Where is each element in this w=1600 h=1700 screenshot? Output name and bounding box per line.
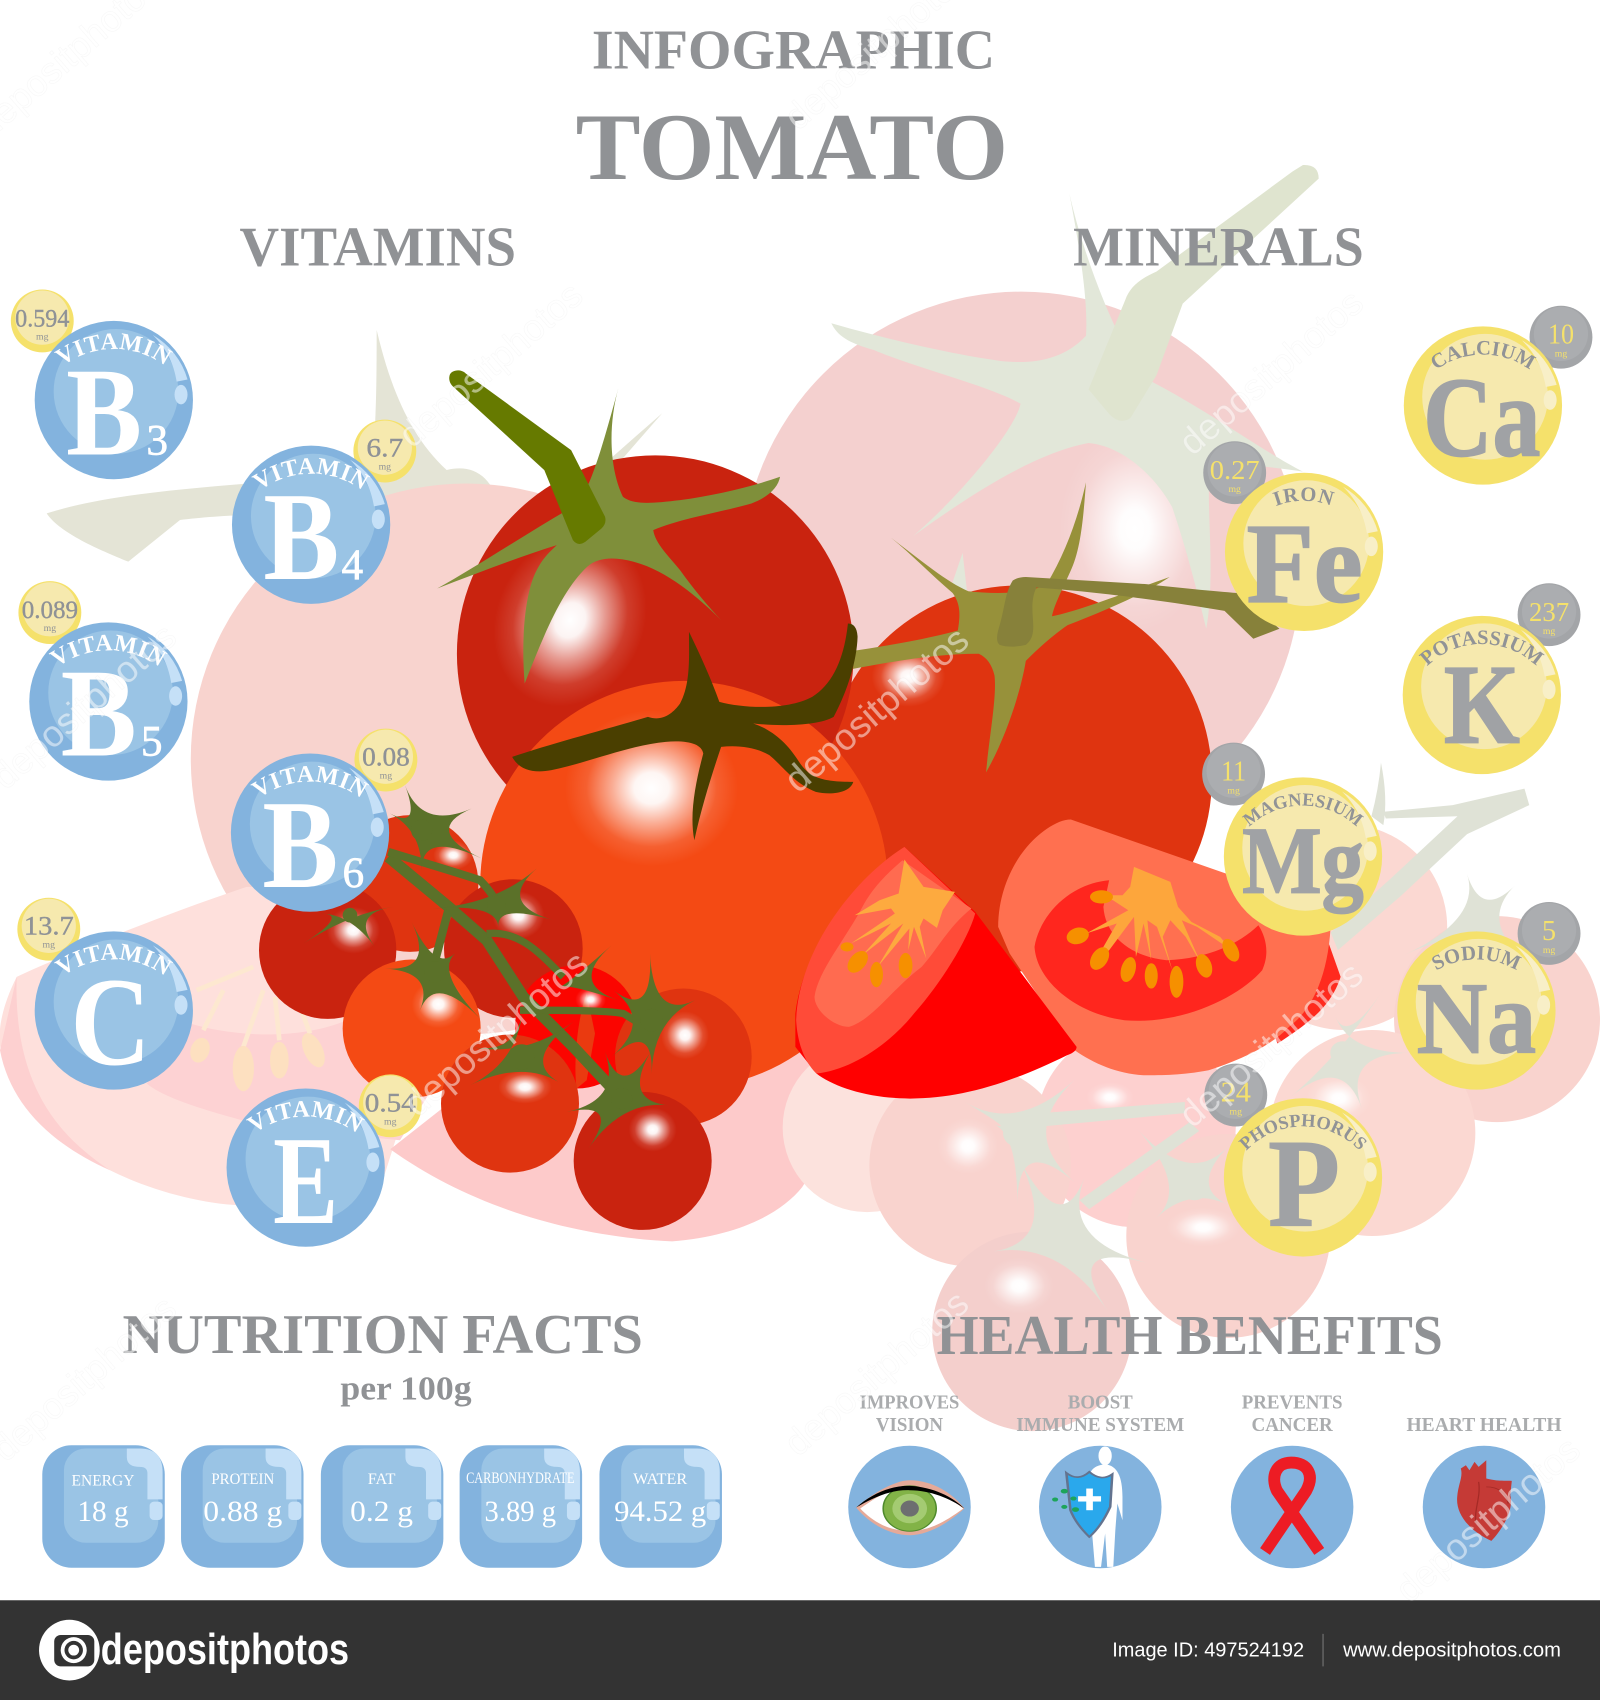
- benefit labels: IMPROVES: [860, 1392, 959, 1413]
- vitamin B3: 3: [146, 416, 168, 464]
- subheading per 100g: per 100g: [340, 1371, 472, 1408]
- vitamin C: mg: [43, 940, 55, 951]
- mineral calcium: CALCIUM: [1432, 340, 1536, 370]
- footer logo text: depositphotos: [101, 1626, 349, 1674]
- faded cherry stems: [965, 763, 1529, 1312]
- heading vitamins: VITAMINS: [240, 217, 516, 279]
- mineral potassium: POTASSIUM: [1418, 630, 1544, 666]
- icon: heart: [1423, 1446, 1545, 1568]
- website: www.depositphotos.com: [1342, 1639, 1561, 1662]
- vitamin C: [17, 898, 193, 1093]
- vitamin B5: mg: [44, 623, 56, 634]
- vitamin E: 0.54: [365, 1088, 416, 1117]
- faded big tomato: [741, 292, 1301, 851]
- vitamin B3: mg: [36, 331, 49, 342]
- vitamin B3: 0.594: [15, 305, 70, 332]
- mineral calcium: mg: [1555, 349, 1567, 360]
- watermarks: depositphotos: [1388, 1429, 1588, 1610]
- left wedge: [795, 847, 1077, 1099]
- watermarks: depositphotos: [776, 1282, 976, 1464]
- tile carbohydrate: [460, 1445, 582, 1568]
- vitamin B4: 4: [341, 541, 363, 589]
- vitamin B6: VITAMIN: [250, 766, 370, 797]
- vitamin bubbles: [10, 290, 422, 1251]
- vitamin B6: 0.08: [362, 742, 410, 771]
- mineral iron: IRON: [1272, 487, 1335, 506]
- tile carbohydrate: CARBONHYDRATE: [466, 1469, 575, 1487]
- image id: Image ID: 497524192: [1112, 1639, 1304, 1662]
- mineral bubbles: [1202, 306, 1592, 1257]
- watermarks: depositphotos: [396, 943, 596, 1124]
- vitamin B5: VITAMIN: [48, 634, 168, 666]
- vitamin B4: mg: [379, 461, 391, 472]
- mineral magnesium: Mg: [1242, 807, 1364, 913]
- tile water: [599, 1445, 722, 1568]
- vitamin B6: 6: [343, 849, 364, 897]
- vitamin B4: 6.7: [366, 433, 403, 462]
- right tomato calyx: [848, 482, 1279, 772]
- faded spike: [609, 413, 662, 464]
- faded cherries right: [783, 824, 1600, 1431]
- mineral sodium: mg: [1543, 945, 1555, 956]
- vitamin B5: 0.089: [22, 597, 78, 624]
- vitamin B5: [18, 581, 188, 784]
- icon: cancer ribbon: [1231, 1446, 1353, 1568]
- vitamin B5: 5: [141, 718, 163, 766]
- mineral phosphorus: 24: [1221, 1078, 1251, 1109]
- mineral sodium: [1397, 902, 1580, 1090]
- watermarks: depositphotos: [390, 274, 590, 455]
- faded top right star calyx: [831, 165, 1319, 629]
- watermarks: depositphotos: [1171, 954, 1371, 1135]
- tile energy: [42, 1445, 165, 1568]
- mineral sodium: Na: [1417, 963, 1536, 1076]
- mineral sodium: 5: [1542, 916, 1556, 947]
- benefit labels: IMMUNE SYSTEM: [1016, 1415, 1184, 1436]
- icon: immune shield: [1039, 1446, 1162, 1568]
- title: INFOGRAPHIC: [592, 19, 995, 81]
- vitamin C: 13.7: [24, 912, 74, 941]
- vitamin E: E: [273, 1112, 338, 1251]
- benefit labels: HEART HEALTH: [1407, 1415, 1562, 1436]
- mineral calcium: 10: [1548, 320, 1574, 351]
- main title: TOMATO: [576, 94, 1008, 200]
- center tomato calyx: [512, 623, 858, 840]
- mineral calcium: [1404, 306, 1592, 485]
- top tomato: [437, 370, 854, 852]
- vitamin B4: [232, 420, 416, 607]
- mineral iron: [1203, 441, 1384, 631]
- panel: nutrition facts: [42, 1304, 722, 1568]
- heading minerals: MINERALS: [1073, 217, 1364, 279]
- tile fat: [321, 1445, 443, 1568]
- benefit labels: BOOST: [1068, 1392, 1133, 1413]
- benefit labels: PREVENTS: [1242, 1392, 1343, 1413]
- mineral phosphorus: P: [1268, 1114, 1340, 1252]
- faded left tomato: [191, 484, 741, 1034]
- panel: health benefits: [848, 1305, 1562, 1568]
- vitamin B3: B: [66, 343, 142, 482]
- mineral phosphorus: PHOSPHORUS: [1238, 1114, 1367, 1150]
- mineral phosphorus: mg: [1230, 1107, 1242, 1118]
- right slice: [998, 820, 1341, 1075]
- vitamin E: [226, 1074, 422, 1251]
- cherry stems: [388, 852, 645, 1097]
- tile fat: FAT: [368, 1470, 395, 1488]
- mineral potassium: mg: [1543, 626, 1555, 637]
- faded tomato slice left: [0, 887, 433, 1205]
- vitamin B6: mg: [380, 770, 392, 781]
- watermarks: depositphotos: [776, 619, 976, 800]
- mineral magnesium: 11: [1221, 757, 1246, 788]
- tile protein: [181, 1445, 304, 1568]
- vitamin B6: [230, 728, 418, 915]
- tile energy: ENERGY: [72, 1471, 135, 1489]
- vitamin C: C: [70, 954, 151, 1093]
- vitamin E: mg: [384, 1116, 397, 1127]
- section headings: [240, 19, 1364, 279]
- cherry tomato branch: [259, 785, 752, 1230]
- faded small spike: [950, 553, 967, 591]
- faded tomato highlight: [1059, 426, 1211, 632]
- mineral sodium: SODIUM: [1432, 946, 1522, 970]
- faded wedge bottom: [390, 976, 867, 1241]
- footer bar: [0, 1600, 1600, 1700]
- right tomato: [826, 482, 1279, 971]
- main tomatoes: [437, 370, 1279, 1089]
- vitamin C: VITAMIN: [54, 944, 173, 975]
- mineral iron: 0.27: [1210, 455, 1260, 485]
- tile protein: 0.88 g: [203, 1496, 283, 1528]
- tile water: WATER: [633, 1470, 687, 1488]
- benefit labels: VISION: [876, 1415, 943, 1436]
- mineral potassium: [1402, 583, 1580, 774]
- tile water: 94.52 g: [614, 1496, 707, 1528]
- tomato slices: [795, 820, 1341, 1099]
- faded left stem: [47, 330, 501, 603]
- center tomato: [480, 623, 888, 1089]
- tile carbohydrate: 3.89 g: [485, 1496, 556, 1528]
- tile energy: 18 g: [77, 1496, 129, 1528]
- vitamin B3: [10, 290, 193, 482]
- heading nutrition facts: NUTRITION FACTS: [122, 1304, 643, 1366]
- watermarks: depositphotos: [1171, 281, 1371, 463]
- vitamin B6: B: [262, 776, 338, 915]
- mineral iron: Fe: [1247, 501, 1363, 627]
- mineral potassium: 237: [1529, 597, 1569, 627]
- tile fat: 0.2 g: [350, 1496, 413, 1528]
- vitamin E: VITAMIN: [246, 1100, 365, 1132]
- heading health benefits: HEALTH BENEFITS: [937, 1305, 1443, 1367]
- mineral magnesium: [1202, 742, 1382, 936]
- top tomato calyx: [437, 370, 780, 683]
- footer logo icon: [39, 1620, 100, 1680]
- benefit labels: CANCER: [1251, 1415, 1334, 1436]
- vitamin B4: B: [263, 468, 339, 607]
- tile protein: PROTEIN: [211, 1470, 274, 1488]
- mineral phosphorus: [1204, 1064, 1382, 1257]
- vitamin B4: VITAMIN: [251, 458, 370, 489]
- faded background tomatoes: [0, 165, 1600, 1431]
- mineral potassium: K: [1444, 642, 1520, 768]
- benefit labels: [860, 1392, 1562, 1436]
- cherry calyxes: [303, 785, 695, 1149]
- mineral magnesium: mg: [1227, 786, 1240, 797]
- vitamin B3: VITAMIN: [54, 333, 173, 364]
- mineral iron: mg: [1228, 484, 1241, 495]
- mineral magnesium: MAGNESIUM: [1242, 793, 1364, 826]
- mineral calcium: Ca: [1423, 354, 1540, 480]
- vitamin B5: B: [61, 645, 137, 784]
- icon: eye: [848, 1446, 971, 1568]
